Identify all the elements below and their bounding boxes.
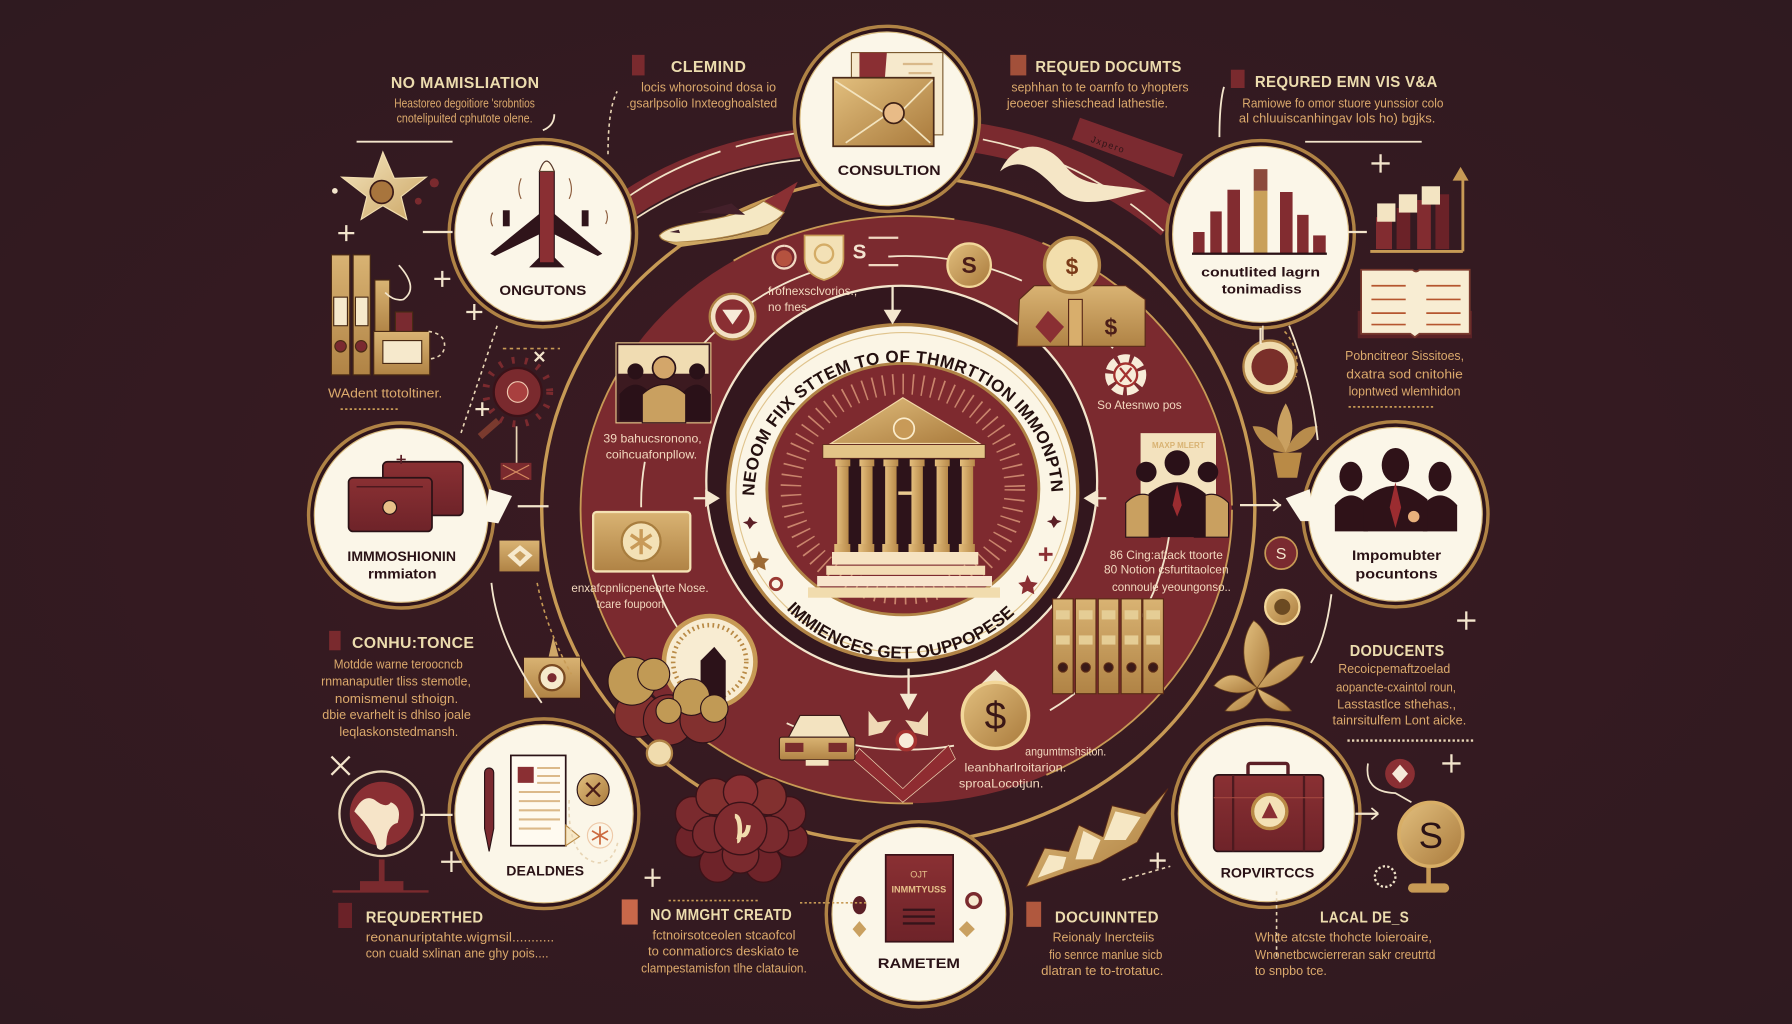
text block: docuinnted (1026, 902, 1163, 978)
text block: doducents (1333, 643, 1466, 728)
arc band: top right (971, 137, 1170, 231)
text block: requderthed: con cuald sxlinan ane ghy pois.... (366, 947, 549, 961)
icon: envelope (833, 53, 943, 146)
circle: bottom book (826, 822, 1011, 1007)
red tag: Jxpero (1090, 134, 1125, 155)
text block: no mamisliation: Heastoreo degoitiore 'srobntios (394, 96, 535, 110)
medallion band (728, 325, 1078, 661)
icon: dollar lamp: S (1419, 815, 1443, 856)
dial and cloud (608, 616, 755, 745)
text block: conhutonce: nomismenul sthoign. (335, 692, 458, 706)
icon: red book (853, 855, 981, 942)
rose (675, 775, 808, 882)
text block: requderthed (338, 903, 554, 961)
arrows around medallion (694, 286, 1106, 707)
icon: wax seal (1243, 326, 1296, 393)
icon: dollar lamp (1399, 802, 1463, 893)
text block: no mmght creatd: NO MMGHT CREATD (650, 907, 792, 924)
text block: no mmght creatd (622, 899, 807, 976)
arc band: top left (623, 133, 802, 222)
icon: small coins right (1265, 537, 1299, 624)
text block: no mamisliation: NO MAMISLIATION (391, 75, 539, 92)
circle: deadlines (449, 719, 639, 909)
text on band: right (1104, 548, 1231, 594)
ring lines (581, 216, 1232, 803)
text block: docuinnted: fio senrce manlue sicb (1049, 948, 1162, 962)
caption left (328, 387, 442, 409)
circle: plane (449, 139, 637, 327)
text block: no mamisliation (391, 75, 539, 125)
text block: no mmght creatd: to conmatiorcs deskiato te (648, 944, 799, 958)
text block: clemind (626, 55, 777, 110)
text on band: lower right (959, 744, 1106, 790)
icon: red book: OJT (910, 870, 928, 880)
label (1201, 265, 1320, 297)
label: pocuntons (1355, 566, 1438, 582)
medallion disk (767, 363, 1039, 615)
caption right: dxatra sod cnitohie (1346, 367, 1463, 381)
text on band: left (603, 431, 702, 461)
outer gold ring (542, 176, 1255, 843)
coin dollar top (947, 243, 991, 287)
text on band: lower right: sproaLocotjun. (959, 776, 1043, 790)
icon: leaf (1214, 621, 1304, 711)
caption right: Pobncitreor Sissitoes, (1345, 349, 1464, 363)
circle: chart (1167, 141, 1354, 328)
shield icon: S (853, 240, 866, 263)
text on band: right: 86 Cing:aftack ttoorte (1110, 548, 1223, 562)
bar chart (1192, 169, 1327, 255)
text block: doducents: DODUCENTS (1350, 643, 1445, 660)
money bag box: $ (1104, 314, 1117, 340)
text block: lacal des: Wnonetbcwcierreran sakr creutrtd (1255, 948, 1435, 962)
text on band: top: no fnes (768, 300, 807, 314)
text block: docuinnted: DOCUINNTED (1055, 909, 1159, 926)
text block: requderthed: reonanuriptahte.wigmsil........... (366, 931, 554, 945)
gear and chevron (853, 711, 955, 802)
text on band: lower left: enxafcpnlicpeneorte Nose. (571, 581, 709, 595)
text on band: gear caption: So Atesnwo pos (1097, 398, 1182, 412)
inner dark ring (706, 286, 1097, 677)
connectors and sparkles (331, 154, 1475, 887)
text block: docuinnted: dlatran te to-trotatuc. (1041, 964, 1163, 978)
icon: diamond tile (499, 541, 539, 571)
icon: star (332, 152, 439, 219)
text block: requred emn vis v&a: al chluuiscanhingav lols ho) bgjks. (1239, 111, 1435, 125)
money bag box: $ (1066, 253, 1079, 279)
text block: requderthed: REQUDERTHED (366, 909, 483, 926)
icon: binders (331, 255, 430, 375)
label: ONGUTONS (499, 283, 586, 299)
text block: conhutonce: CONHU:TONCE (352, 635, 474, 652)
text block: conhutonce: dbie evarhelt is dhlso joale (322, 708, 471, 722)
caption right: lopntwed wlemhidon (1349, 384, 1461, 398)
text on band: lower left: tcare foupoon (597, 597, 664, 611)
label: conutlited lagrn (1201, 265, 1320, 280)
icon: briefcase (1214, 763, 1323, 851)
ribbon swoosh (1000, 147, 1146, 202)
text block: conhutonce (321, 631, 474, 739)
label: IMMMOSHIONIN (347, 549, 456, 565)
caption right (1345, 349, 1464, 407)
text block: requred emn vis v&a (1231, 70, 1443, 125)
text block: conhutonce: Motdde warne teroocncb (334, 658, 463, 672)
dashed decorations (429, 91, 1474, 958)
speech pointers (485, 489, 1314, 523)
car (779, 715, 855, 766)
people card left (616, 343, 711, 423)
small gold knob (647, 741, 672, 766)
text block: conhutonce: rnmanaputler tliss stemotle, (321, 675, 471, 689)
label: RAMETEM (878, 956, 960, 972)
coin dollar top: S (962, 252, 977, 278)
text on band: left: coihcuafonpllow. (606, 447, 697, 461)
text block: clemind: .gsarlpsolio Inxteoghoalsted (626, 96, 777, 110)
lightning gold (1026, 789, 1168, 887)
text on band: top (768, 284, 857, 314)
text block: requed documts: jeoeoer shieschead lathestie. (1006, 96, 1168, 110)
icon: mini bar chart (1370, 167, 1469, 251)
text on band: right: 80 Notion csfurtitaolcen (1104, 563, 1229, 577)
gold plane (659, 182, 798, 247)
circle: people (1303, 422, 1488, 607)
text block: doducents: tainrsitulfem Lont aicke. (1333, 714, 1466, 728)
text block: lacal des (1255, 909, 1435, 978)
label: DEALDNES (506, 863, 584, 879)
red tag (1072, 118, 1183, 177)
text block: requed documts: sephhan to te oarnfo to yhopters (1011, 80, 1189, 94)
label (347, 549, 456, 582)
icon: dotted diamond (1375, 866, 1395, 887)
gold card (593, 512, 690, 571)
text block: no mmght creatd: fctnoirsotceolen stcaofcol (653, 928, 795, 942)
text block: conhutonce: leqlaskonstedmansh. (339, 725, 458, 739)
icon: red book: INMMTYUSS (891, 885, 946, 895)
binders lower right (1053, 599, 1163, 694)
text block: no mmght creatd: clampestamisfon tlhe clatauion. (641, 962, 807, 976)
dollar coin large: $ (985, 695, 1006, 738)
caption left: WAdent ttotoltiner. (328, 387, 442, 401)
icon: people (1335, 448, 1457, 531)
text block: clemind: locis whorosoind dosa io (641, 80, 776, 94)
shield icon (773, 235, 898, 280)
text on band: top: frofnexsclvorios., (768, 284, 857, 298)
icon: small bag (523, 637, 581, 698)
icon: airplane (490, 161, 607, 267)
dollar coin large (962, 670, 1029, 749)
text block: lacal des: to snpbo tce. (1255, 964, 1327, 978)
icon: document and pen (485, 755, 613, 851)
icon: plant (1253, 403, 1318, 478)
text on band: lower right: angumtmshsiton. (1025, 744, 1106, 758)
text on band: lower right: leanbharlroitarion. (965, 760, 1066, 774)
text block: requred emn vis v&a: Ramiowe fo omor stuore yunssior colo (1242, 96, 1443, 110)
label: ROPVIRTCCS (1221, 866, 1314, 882)
maroon ring band (581, 216, 1232, 803)
text block: requred emn vis v&a: REQURED EMN VIS V&A (1255, 74, 1438, 91)
icon: magnifier gear (480, 360, 550, 480)
text block: doducents: Recoicpemaftzoelad (1338, 662, 1450, 676)
people card right (1126, 433, 1229, 537)
text block: lacal des: White atcste thohcte loieroaire, (1255, 931, 1432, 945)
text block: doducents: Lasstastlce sthehas., (1337, 698, 1456, 712)
temple (808, 398, 1000, 598)
circle: immigration (309, 423, 494, 608)
text on band: lower left (571, 581, 709, 611)
text block: no mamisliation: cnotelipuited cphutote olene. (397, 111, 533, 125)
label (1352, 548, 1442, 582)
text on band: left: 39 bahucsronono, (603, 431, 702, 445)
text block: clemind: CLEMIND (671, 59, 746, 76)
diamond shield (710, 294, 755, 339)
icon: balloon (1367, 759, 1415, 802)
rays (791, 384, 1015, 594)
label: Impomubter (1352, 548, 1442, 564)
icon: small coins right: S (1276, 546, 1286, 563)
text on band: right: connoule yeoungonso.. (1112, 580, 1231, 594)
central medallion (726, 322, 1080, 662)
text block: lacal des: LACAL DE_S (1320, 909, 1409, 926)
band marks (743, 515, 1062, 594)
label: tonimadiss (1222, 282, 1302, 297)
solid decorations (357, 87, 1422, 703)
cream gear (1110, 359, 1142, 391)
text block: docuinnted: Reionaly Inercteiis (1053, 931, 1154, 945)
people card right: MAXP MLERT (1152, 440, 1205, 450)
money bag box (1017, 238, 1145, 346)
curved subtitle bottom: IMMIENCES GET OUPPOPESE (787, 602, 1014, 659)
text block: doducents: aopancte-cxaintol roun, (1336, 680, 1456, 694)
curved title top: NEOOM FIIX STTEM TO OF THMRTTION IMMONPTN (742, 350, 1064, 495)
label: rmmiaton (368, 566, 437, 582)
text block: requed documts (1006, 55, 1189, 110)
text block: requed documts: REQUED DOCUMTS (1035, 59, 1182, 76)
circle: briefcase (1173, 720, 1360, 907)
icon: open book (1358, 270, 1472, 338)
circle: consultation (794, 26, 979, 211)
icon: cards (349, 455, 463, 531)
label: CONSULTION (838, 163, 941, 179)
icon: globe (333, 771, 429, 891)
ring (794, 26, 979, 211)
